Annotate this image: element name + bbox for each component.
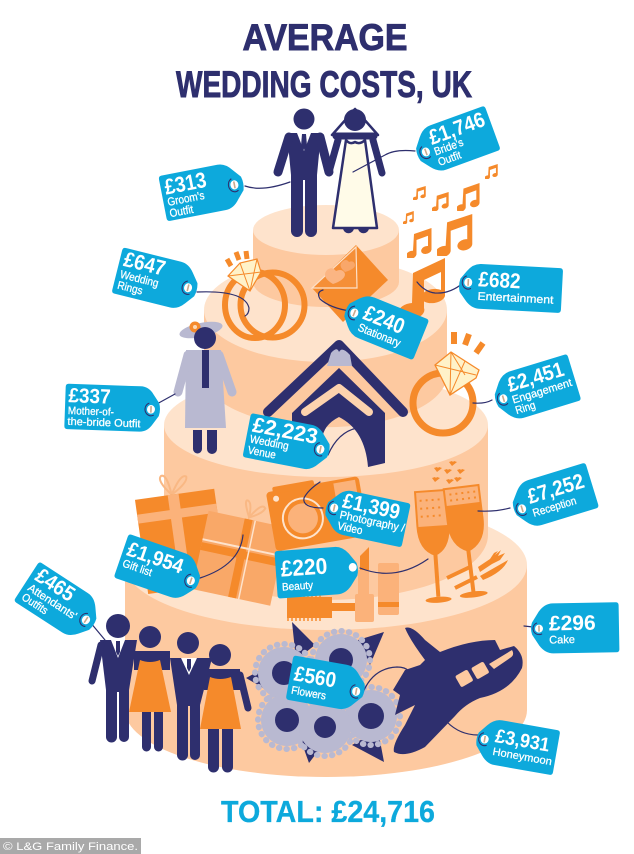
icon: attendants — [92, 614, 248, 772]
tag: entertainment — [458, 263, 563, 313]
tag: wedding venue: Wedding — [249, 433, 290, 453]
tag: wedding venue: £2,223 — [251, 414, 320, 449]
tag: stationary — [338, 289, 429, 360]
tag: honeymoon: Honeymoon — [492, 747, 553, 768]
icon: music notes — [399, 164, 498, 319]
tag: entertainment: Entertainment — [477, 290, 554, 307]
tag: gift list — [114, 534, 206, 604]
tag strings — [90, 150, 533, 735]
tag: bride's outfit — [409, 106, 501, 177]
icon: engagement ring — [413, 332, 483, 433]
icon: aeroplane — [393, 628, 523, 754]
tag: bride's outfit: Outfit — [436, 149, 463, 169]
icon: groom — [278, 108, 329, 237]
tag: wedding rings: Rings — [116, 279, 144, 298]
tag: cake: £296 — [549, 612, 596, 635]
title: WEDDING COSTS, UK — [176, 64, 472, 105]
tag: groom's outfit: Groom's — [166, 189, 206, 209]
icon: beauty products — [287, 547, 399, 622]
tag: attendants' outfits: Outfits — [19, 591, 50, 617]
tag: gift list: Gift list — [121, 557, 154, 579]
tag: entertainment: £682 — [478, 268, 521, 294]
title — [176, 17, 472, 105]
tag: reception — [507, 463, 599, 532]
tag: reception: £7,252 — [525, 470, 587, 509]
icon: envelope — [312, 245, 388, 322]
tag: wedding rings — [112, 247, 202, 313]
tag: photography / video: Photography / — [339, 509, 406, 535]
tag: gift list: £1,954 — [124, 538, 186, 579]
icon: wedding venue — [268, 345, 403, 467]
tag: stationary: £240 — [360, 301, 408, 339]
icon: bride — [329, 109, 382, 233]
tag: wedding venue: Venue — [247, 444, 277, 462]
tag: bride's outfit: Bride's — [432, 136, 465, 158]
tag: photography / video: Video — [336, 520, 364, 538]
tag: engagement ring: £2,451 — [505, 358, 567, 397]
tag: beauty — [274, 545, 360, 599]
icon: gifts — [132, 469, 291, 606]
icon: camera — [265, 472, 369, 552]
tag: mother-of-the-bride outfit: Mother-of- — [68, 406, 114, 419]
icon: flowers — [246, 622, 400, 763]
title: AVERAGE — [242, 17, 408, 58]
tag: honeymoon: £3,931 — [494, 725, 552, 756]
tag: wedding rings: Wedding — [119, 268, 160, 290]
tag: flowers — [286, 655, 369, 713]
tag: honeymoon — [472, 717, 560, 775]
tag: bride's outfit: £1,746 — [426, 108, 488, 150]
tag: mother-of-the-bride outfit: the-bride Outfit — [67, 417, 141, 430]
tag: mother-of-the-bride outfit — [64, 384, 161, 432]
tag: cake: Cake — [549, 634, 575, 646]
tag: photography / video — [321, 487, 411, 547]
icon: wedding rings — [225, 251, 304, 338]
icon: mother of the bride — [178, 319, 232, 454]
tag: wedding rings: £647 — [121, 248, 168, 281]
wedding cake — [125, 205, 527, 777]
tag: groom's outfit: Outfit — [169, 203, 194, 220]
tag: flowers: £560 — [292, 663, 338, 693]
tag: engagement ring: Ring — [514, 399, 537, 417]
tag: photography / video: £1,399 — [340, 490, 402, 524]
tag: attendants' outfits: Attendants' — [25, 582, 79, 623]
tag: attendants' outfits — [14, 561, 106, 645]
tag: engagement ring: Engagement — [511, 377, 574, 407]
total: TOTAL: £24,716 — [221, 794, 435, 829]
tag: cake — [530, 602, 619, 654]
icon: champagne glasses — [414, 461, 493, 604]
tag: flowers: Flowers — [290, 684, 327, 703]
tag: wedding venue — [242, 413, 334, 473]
credit: © L&G Family Finance. — [3, 841, 138, 853]
icon: cutlery — [447, 550, 508, 588]
tag: groom's outfit — [158, 161, 248, 221]
tag: beauty: £220 — [280, 553, 328, 582]
tag: beauty: Beauty — [282, 580, 314, 594]
tag: engagement ring — [489, 354, 581, 424]
tag: reception: Reception — [531, 495, 578, 520]
tag: stationary: Stationary — [356, 321, 403, 350]
credit — [0, 838, 141, 854]
tag: attendants' outfits: £465 — [31, 564, 79, 607]
tag: mother-of-the-bride outfit: £337 — [68, 385, 111, 409]
tag: groom's outfit: £313 — [162, 168, 209, 200]
